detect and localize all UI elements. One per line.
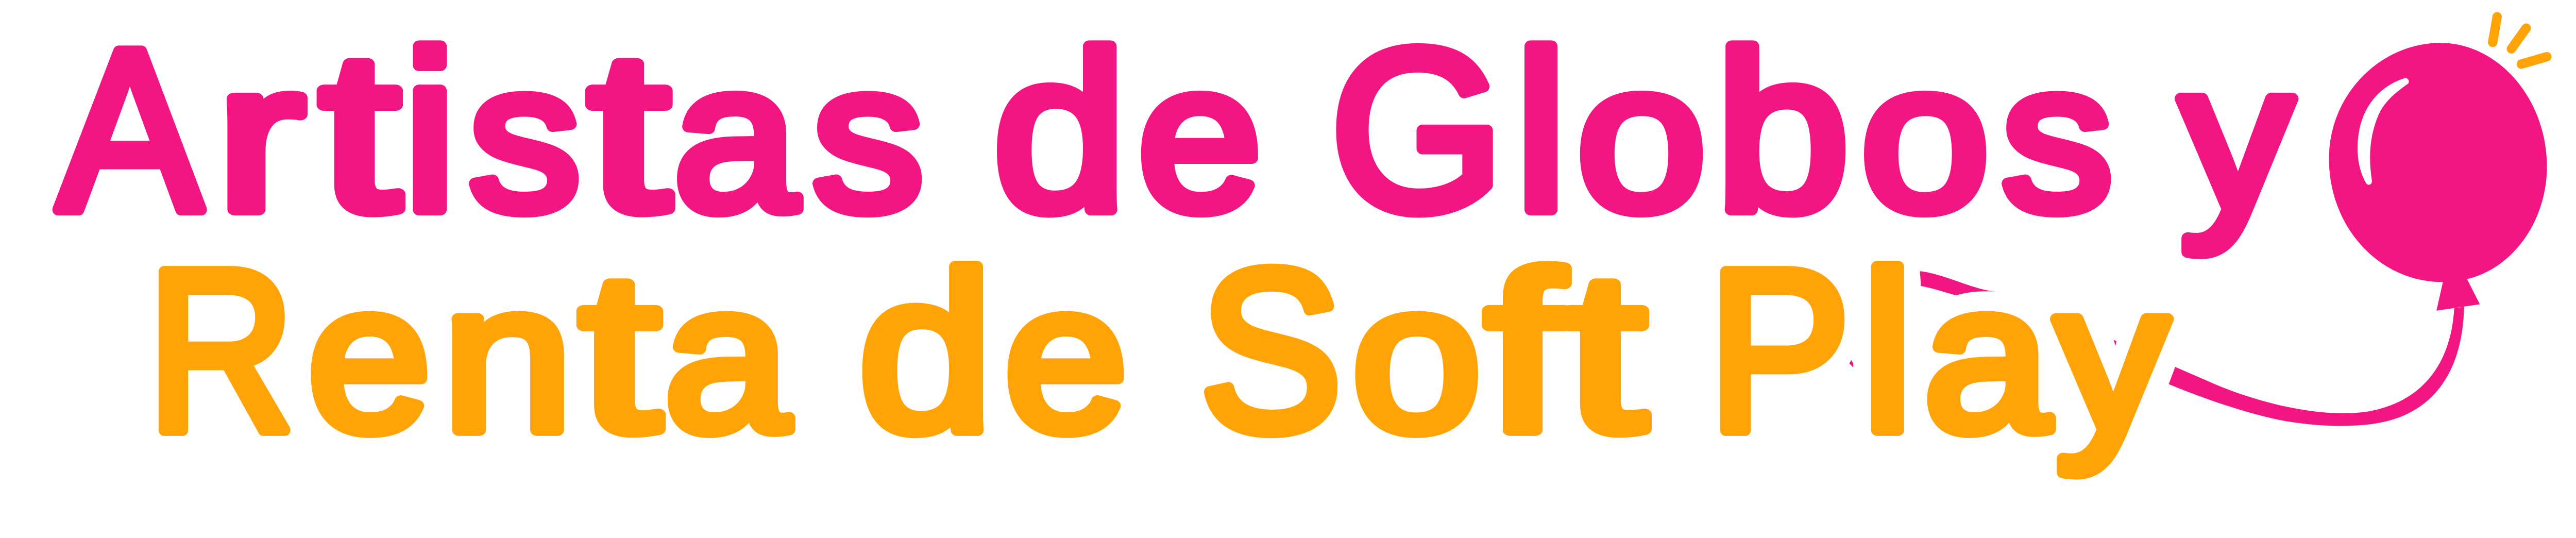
title line 2: Renta de Soft Play: S bbox=[1200, 222, 1342, 479]
title line 2: Renta de Soft Play: o bbox=[1352, 240, 1481, 475]
title line 2: Renta de Soft Play: a bbox=[665, 240, 790, 475]
title line 1: Artistas de Globos y: e bbox=[1138, 20, 1262, 255]
title line 2: Renta de Soft Play: y bbox=[2056, 240, 2168, 476]
title line 1: Artistas de Globos y: i bbox=[403, 6, 456, 258]
balloon body bbox=[2329, 43, 2547, 311]
title line 1: Artistas de Globos y: b bbox=[1716, 6, 1850, 258]
title line 2: Renta de Soft Play: n bbox=[443, 240, 572, 475]
title line 2: Renta de Soft Play: t bbox=[580, 226, 661, 478]
title line 2: Renta de Soft Play: f bbox=[1485, 226, 1565, 478]
title line 2: Renta de Soft Play: R bbox=[147, 222, 295, 479]
title line 1: Artistas de Globos y: o bbox=[1861, 20, 1990, 255]
title line 1: Artistas de Globos y: d bbox=[993, 6, 1127, 258]
small pink fleck beside P bbox=[1849, 360, 1853, 367]
title line 1: Artistas de Globos y: o bbox=[1577, 20, 1706, 255]
stray pink accent above the a in Play bbox=[1920, 271, 1996, 295]
title line 1: Artistas de Globos y: r bbox=[216, 20, 304, 255]
title line 1: Artistas de Globos y: A bbox=[58, 2, 203, 259]
title line 2: Renta de Soft Play: l bbox=[1861, 226, 1913, 478]
title line 2: Renta de Soft Play: d bbox=[858, 226, 993, 478]
title line 1: Artistas de Globos y: a bbox=[674, 20, 799, 255]
balloon string bbox=[2169, 307, 2464, 426]
title line 2: Renta de Soft Play: P bbox=[1708, 222, 1850, 479]
title line 2: Renta de Soft Play: t bbox=[1566, 226, 1647, 478]
small pink fleck inside y bbox=[2113, 340, 2116, 346]
balloon highlight bbox=[2358, 78, 2409, 185]
title line 1: Artistas de Globos y: t bbox=[320, 6, 401, 258]
title line 1: Artistas de Globos y: s bbox=[2002, 20, 2113, 255]
title line 1: Artistas de Globos y: s bbox=[469, 20, 581, 255]
title line 1: Artistas de Globos y: G bbox=[1331, 2, 1504, 259]
title line 1: Artistas de Globos y: y bbox=[2180, 20, 2293, 256]
title line 1: Artistas de Globos y: l bbox=[1515, 6, 1567, 258]
icon: three orange spark lines bbox=[2493, 17, 2547, 64]
title line 2: Renta de Soft Play: a bbox=[1924, 240, 2051, 475]
title line 1: Artistas de Globos y: t bbox=[588, 6, 671, 258]
icon: pink balloon with string bbox=[2169, 43, 2547, 426]
title line 2: Renta de Soft Play: e bbox=[308, 240, 431, 475]
title line 1: Artistas de Globos y: s bbox=[812, 20, 924, 255]
title line 2: Renta de Soft Play: e bbox=[1004, 240, 1127, 475]
